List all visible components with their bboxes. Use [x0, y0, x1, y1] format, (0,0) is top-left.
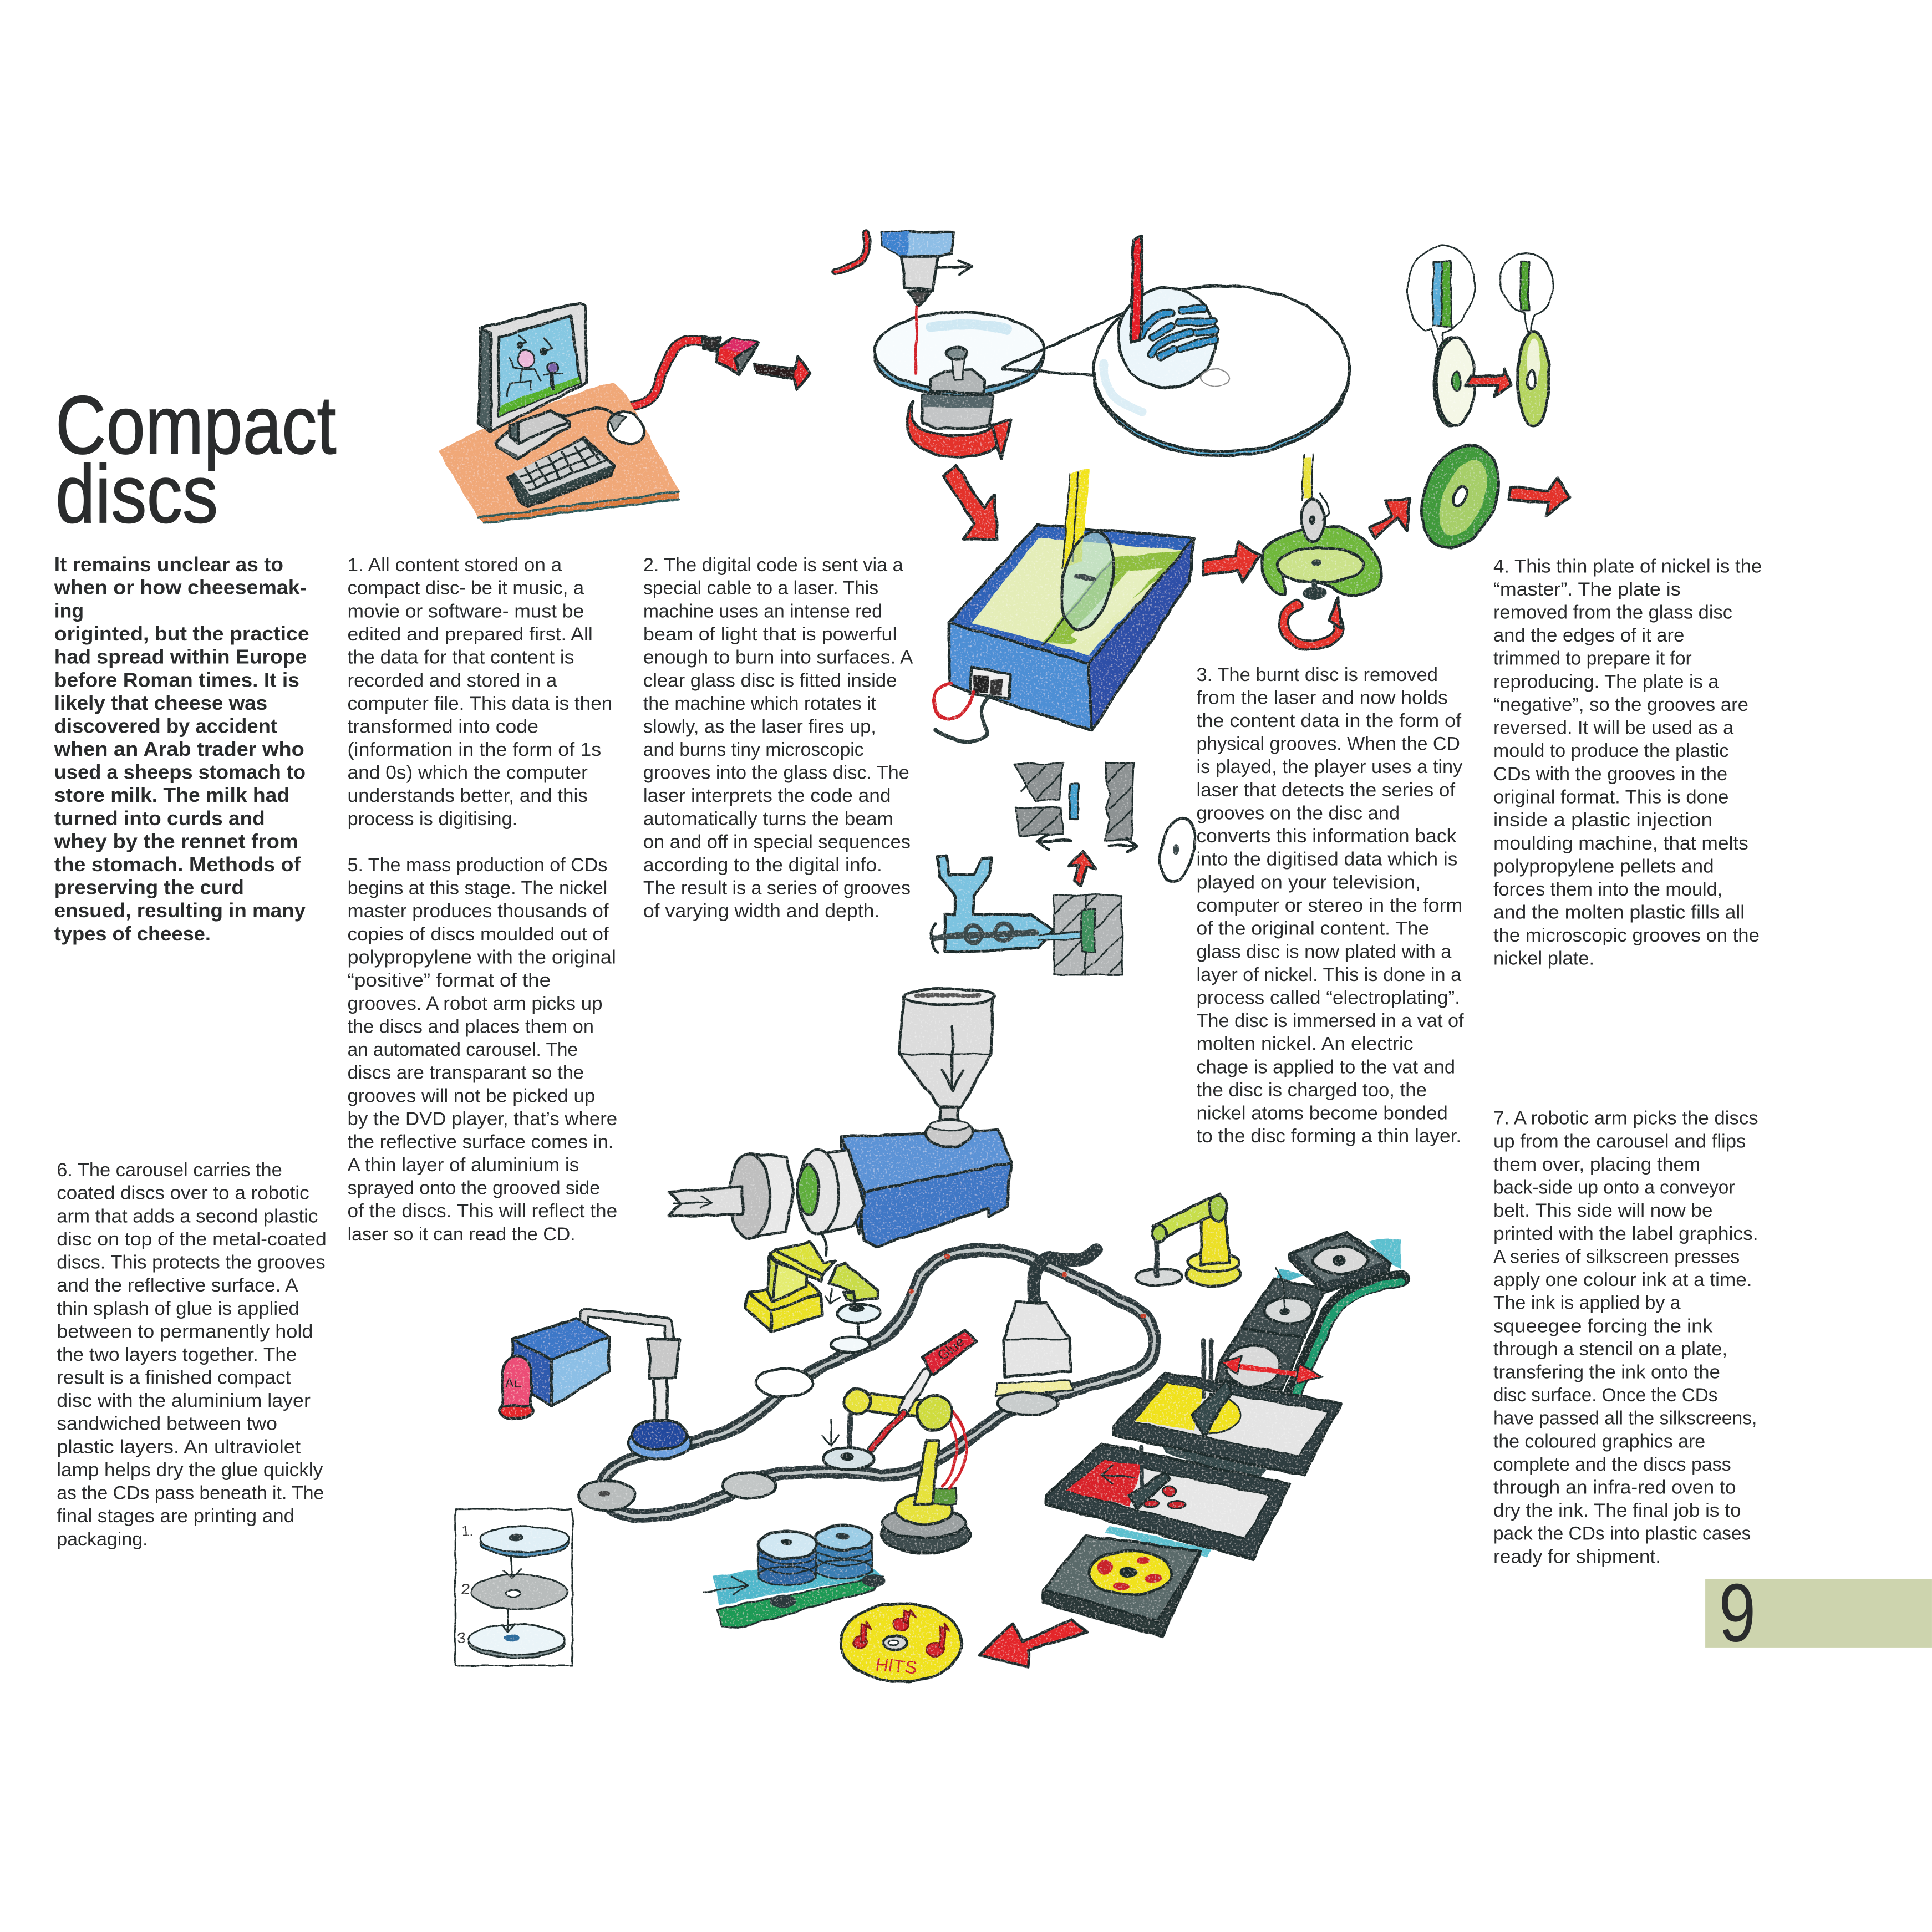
text block: step 5: polypropylene with the original	[348, 947, 616, 968]
text block: step 6: result is a finished compact	[57, 1367, 291, 1389]
text block: step 5: the discs and places them on	[348, 1016, 594, 1037]
text block: step 3: is played, the player uses a tiny	[1196, 756, 1463, 777]
text block: step 4: moulding machine, that melts	[1493, 833, 1748, 854]
text block: bold introduction: before Roman times. It is	[54, 668, 299, 691]
illustration: aluminium sprayer	[500, 1313, 691, 1459]
illustration: nickel plate peeled from disc	[1262, 455, 1381, 645]
text block: step 1: (information in the form of 1s	[348, 739, 601, 760]
text block: step 3: played on your television,	[1196, 872, 1421, 893]
text block: step 4: and the molten plastic fills all	[1493, 902, 1745, 923]
illustration: moulded disc	[1155, 815, 1200, 885]
text block: step 7: the coloured graphics are	[1493, 1431, 1705, 1452]
text block: step 1: 1. All content stored on a	[348, 555, 562, 576]
text block: step 3: nickel atoms become bonded	[1196, 1103, 1448, 1124]
illustration: computer on desk	[438, 302, 679, 524]
illustration: print tray column with discs	[1217, 1232, 1391, 1390]
page number tab: 9	[1719, 1567, 1756, 1659]
text block: step 3: the content data in the form of	[1196, 710, 1462, 731]
illustration: stages of finished disc layers: 3	[457, 1628, 466, 1646]
text block: bold introduction: whey by the rennet from	[54, 830, 298, 853]
text block: step 3: process called “electroplating”.	[1196, 987, 1460, 1008]
text block: step 7: belt. This side will now be	[1493, 1200, 1712, 1221]
text block: bold introduction: had spread within Europe	[54, 645, 307, 668]
text block: step 7: dry the ink. The final job is to	[1493, 1500, 1741, 1521]
text block: step 6: arm that adds a second plastic	[57, 1206, 318, 1227]
text block: bold introduction: ing	[54, 599, 84, 622]
text block: step 4: nickel plate.	[1493, 948, 1594, 969]
text block: step 4: removed from the glass disc	[1493, 602, 1732, 623]
text block: step 4: 4. This thin plate of nickel is the	[1493, 556, 1762, 577]
illustration: laser burning glass disc	[835, 232, 1044, 459]
text block: bold introduction: preserving the curd	[54, 876, 244, 899]
text block: step 2: machine uses an intense red	[643, 601, 882, 622]
text block: step 4: forces them into the mould,	[1493, 879, 1722, 900]
text block: step 1: and 0s) which the computer	[348, 762, 588, 784]
illustration: mould halves	[1014, 762, 1137, 852]
text block: step 3: to the disc forming a thin layer.	[1196, 1126, 1461, 1147]
text block: bold introduction: types of cheese.	[54, 922, 211, 945]
arrow: vat to plated disc	[1203, 541, 1260, 582]
text block: bold introduction: the stomach. Methods of	[54, 853, 301, 876]
text block: step 7: through a stencil on a plate,	[1493, 1339, 1727, 1360]
text block: bold introduction: when or how cheesemak-	[54, 576, 307, 599]
text block: step 5: laser so it can read the CD.	[348, 1224, 576, 1245]
text block: step 2: The result is a series of grooves	[643, 878, 911, 899]
text block: step 4: reversed. It will be used as a	[1493, 718, 1734, 739]
text block: step 1: compact disc- be it music, a	[348, 578, 584, 599]
text block: step 5: of the discs. This will reflect the	[348, 1201, 617, 1222]
text block: step 3: physical grooves. When the CD	[1196, 734, 1460, 755]
text block: step 4: and the edges of it are	[1493, 625, 1684, 646]
text block: step 2	[643, 555, 913, 922]
text block: bold introduction: ensued, resulting in many	[54, 899, 306, 922]
illustration: carousel conveyor belt	[578, 1250, 1155, 1516]
text block: step 5: grooves. A robot arm picks up	[348, 993, 603, 1014]
text block: step 3: molten nickel. An electric	[1196, 1034, 1414, 1055]
text block: step 7	[1493, 1108, 1758, 1567]
text block: bold introduction: when an Arab trader who	[54, 738, 304, 760]
text block: step 2: and burns tiny microscopic	[643, 739, 864, 760]
illustration: silkscreen press with yellow ink	[1113, 1341, 1341, 1476]
text block: step 6: packaging.	[57, 1529, 148, 1550]
text block: step 5	[348, 855, 617, 1245]
illustration: magnified disc with grooves	[1094, 236, 1349, 456]
text block: step 3: The disc is immersed in a vat of	[1196, 1010, 1464, 1031]
illustration: UV lamp	[995, 1249, 1096, 1415]
text block: step 3: chage is applied to the vat and	[1196, 1056, 1455, 1077]
illustration: glue robot arm: Glue	[935, 1334, 968, 1364]
text block: step 5: by the DVD player, that’s where	[348, 1109, 617, 1130]
text block: step 6	[57, 1160, 327, 1550]
arrow: disc to magnified view	[1003, 289, 1177, 379]
text block: step 7: them over, placing them	[1493, 1154, 1700, 1175]
text block: step 1	[348, 555, 612, 830]
text block: step 5: an automated carousel. The	[348, 1039, 578, 1060]
text block: step 5: sprayed onto the grooved side	[348, 1178, 600, 1199]
arrow: injection to mould	[1069, 851, 1096, 886]
arrow: red double-headed squeegee travel	[1221, 1356, 1323, 1383]
arrow: master to moulding	[1508, 478, 1570, 516]
illustration: stacks of discs on conveyor	[703, 1526, 884, 1628]
text block: step 4: mould to produce the plastic	[1493, 740, 1728, 761]
text block: step 6: final stages are printing and	[57, 1506, 294, 1527]
text block: step 6: between to permanently hold	[57, 1321, 313, 1342]
text block: step 5: the reflective surface comes in.	[348, 1131, 614, 1152]
text block: step 2: the machine which rotates it	[643, 693, 876, 714]
text block: step 3	[1196, 664, 1464, 1147]
arrow: laser to electroplating vat	[943, 465, 997, 540]
illustration: stages of finished disc layers: 1.	[462, 1524, 474, 1539]
callout: nickel plate on glass disc	[1407, 245, 1475, 426]
text block: bold introduction	[54, 553, 309, 945]
text block: step 7: 7. A robotic arm picks the discs	[1493, 1108, 1758, 1129]
text block: step 4: CDs with the grooves in the	[1493, 764, 1727, 785]
text block: step 7: pack the CDs into plastic cases	[1493, 1523, 1751, 1544]
text block: step 2: special cable to a laser. This	[643, 578, 878, 599]
text block: step 6: discs. This protects the grooves	[57, 1252, 326, 1273]
text block: bold introduction: used a sheeps stomach to	[54, 761, 306, 784]
text block: step 6: plastic layers. An ultraviolet	[57, 1437, 301, 1458]
illustration: yellow pick-and-place robot	[746, 1233, 880, 1352]
illustration: flipping robot arm	[1136, 1193, 1240, 1287]
text block: step 7: printed with the label graphics.	[1493, 1223, 1758, 1244]
text block: step 2: grooves into the glass disc. The	[643, 762, 909, 784]
text block: step 6: disc with the aluminium layer	[57, 1390, 311, 1411]
text block: step 2: on and off in special sequences	[643, 832, 911, 853]
text block: bold introduction: store milk. The milk had	[54, 784, 289, 806]
text block: step 1: edited and prepared first. All	[348, 624, 593, 645]
text block: step 5: A thin layer of aluminium is	[348, 1155, 579, 1176]
text block: step 3: from the laser and now holds	[1196, 687, 1448, 708]
text block: step 2: enough to burn into surfaces. A	[643, 647, 913, 668]
connector: red cable from desk to plug	[634, 340, 706, 406]
text block: step 6: sandwiched between two	[57, 1414, 277, 1435]
text block: step 7: up from the carousel and flips	[1493, 1131, 1746, 1152]
arrow: plated disc to green master	[1370, 499, 1410, 538]
illustration: finished HITS disc	[840, 1604, 962, 1682]
text block: step 6: the two layers together. The	[57, 1344, 297, 1365]
illustration: finished HITS disc: HITS	[875, 1654, 918, 1679]
text block: step 2: automatically turns the beam	[643, 809, 893, 830]
text block: step 4: the microscopic grooves on the	[1493, 925, 1760, 946]
title: discs	[55, 448, 218, 540]
illustration: stages of finished disc layers	[455, 1509, 572, 1666]
illustration: plastic injection machine	[932, 856, 1122, 975]
text block: step 5: “positive” format of the	[348, 970, 551, 991]
text block: step 7: squeegee forcing the ink	[1493, 1315, 1713, 1336]
text block: step 4: inside a plastic injection	[1493, 810, 1712, 831]
text block: step 1: the data for that content is	[348, 647, 574, 668]
text block: bold introduction: It remains unclear as to	[54, 553, 283, 576]
text block: step 4: “negative”, so the grooves are	[1493, 694, 1748, 715]
text block: step 7: complete and the discs pass	[1493, 1454, 1731, 1475]
arrow: print stage to finished disc	[979, 1620, 1087, 1667]
text block: bold introduction: likely that cheese was	[54, 692, 267, 714]
text block: step 4: original format. This is done	[1493, 786, 1728, 807]
text block: bold introduction: turned into curds and	[54, 807, 265, 830]
text block: step 4	[1493, 556, 1762, 969]
text block: step 4: trimmed to prepare it for	[1493, 648, 1692, 669]
illustration: electroplating vat	[934, 469, 1194, 742]
text block: step 7: have passed all the silkscreens,	[1493, 1408, 1757, 1429]
title	[55, 379, 337, 540]
text block: step 7: through an infra-red oven to	[1493, 1477, 1736, 1498]
illustration: printed disc tray	[1044, 1536, 1201, 1636]
text block: step 5: copies of discs moulded out of	[348, 924, 609, 945]
connector: plug cable end	[703, 338, 759, 374]
illustration: hopper and moulding barrel	[669, 988, 1011, 1247]
illustration: glue robot arm	[823, 1330, 977, 1553]
text block: step 6: as the CDs pass beneath it. The	[57, 1483, 324, 1504]
arrow: computer to laser	[755, 357, 810, 390]
text block: bold introduction: discovered by accident	[54, 714, 277, 737]
callout: trimmed master plate	[1500, 253, 1553, 426]
text block: step 7: apply one colour ink at a time.	[1493, 1269, 1752, 1290]
illustration: curved teal conveyor	[1105, 1238, 1401, 1558]
text block: step 1: understands better, and this	[348, 785, 588, 806]
text block: step 6: thin splash of glue is applied	[57, 1298, 299, 1319]
text block: step 2: slowly, as the laser fires up,	[643, 716, 876, 737]
text block: step 6: lamp helps dry the glue quickly	[57, 1460, 323, 1481]
text block: step 5: master produces thousands of	[348, 901, 609, 922]
text block: step 4: polypropylene pellets and	[1493, 856, 1714, 877]
text block: step 5: begins at this stage. The nickel	[348, 878, 607, 899]
text block: step 1: recorded and stored in a	[348, 670, 557, 691]
illustration: aluminium sprayer: AL	[506, 1376, 521, 1390]
text block: step 3: 3. The burnt disc is removed	[1196, 664, 1438, 685]
text block: step 3: glass disc is now plated with a	[1196, 941, 1452, 962]
text block: step 1: movie or software- must be	[348, 601, 584, 622]
text block: step 2: clear glass disc is fitted inside	[643, 670, 897, 691]
text block: step 3: layer of nickel. This is done in a	[1196, 964, 1462, 985]
illustration: silkscreen press with red ink	[1046, 1443, 1290, 1559]
text block: step 6: 6. The carousel carries the	[57, 1160, 282, 1181]
text block: step 7: disc surface. Once the CDs	[1493, 1385, 1717, 1406]
text block: step 1: process is digitising.	[348, 809, 517, 830]
illustration: stages of finished disc layers: 2	[461, 1580, 470, 1598]
text block: step 7: back-side up onto a conveyor	[1493, 1177, 1735, 1198]
text block: step 3: the disc is charged too, the	[1196, 1080, 1427, 1101]
text block: step 2: beam of light that is powerful	[643, 624, 897, 645]
text block: step 7: A series of silkscreen presses	[1493, 1246, 1740, 1267]
title: Compact	[55, 379, 337, 471]
page number tab	[1705, 1567, 1932, 1659]
text block: step 5: 5. The mass production of CDs	[348, 855, 607, 876]
text block: step 6: disc on top of the metal-coated	[57, 1229, 327, 1250]
text block: step 3: of the original content. The	[1196, 918, 1429, 939]
text block: step 3: computer or stereo in the form	[1196, 895, 1462, 916]
text block: step 3: grooves on the disc and	[1196, 803, 1400, 824]
text block: step 1: computer file. This data is then	[348, 693, 612, 714]
text block: step 6: coated discs over to a robotic	[57, 1183, 309, 1204]
text block: step 2: of varying width and depth.	[643, 901, 879, 922]
illustration: green nickel master disc	[1407, 434, 1513, 559]
text block: step 5: discs are transparant so the	[348, 1062, 584, 1084]
text block: step 7: transfering the ink onto the	[1493, 1361, 1720, 1382]
text block: step 2: according to the digital info.	[643, 855, 882, 876]
text block: step 6: and the reflective surface. A	[57, 1275, 299, 1296]
text block: step 1: transformed into code	[348, 716, 538, 737]
text block: step 7: ready for shipment.	[1493, 1546, 1661, 1567]
text block: step 3: into the digitised data which is	[1196, 849, 1458, 870]
text block: step 4: reproducing. The plate is a	[1493, 671, 1719, 692]
text block: step 2: laser interprets the code and	[643, 785, 891, 806]
text block: step 3: laser that detects the series of	[1196, 780, 1455, 801]
text block: step 7: The ink is applied by a	[1493, 1293, 1681, 1314]
text block: step 5: grooves will not be picked up	[348, 1085, 595, 1106]
text block: step 3: converts this information back	[1196, 826, 1457, 847]
text block: step 2: 2. The digital code is sent via a	[643, 555, 903, 576]
text block: bold introduction: originted, but the practice	[54, 622, 309, 645]
arrow: disc to master	[1465, 369, 1511, 396]
text block: step 4: “master”. The plate is	[1493, 579, 1681, 600]
